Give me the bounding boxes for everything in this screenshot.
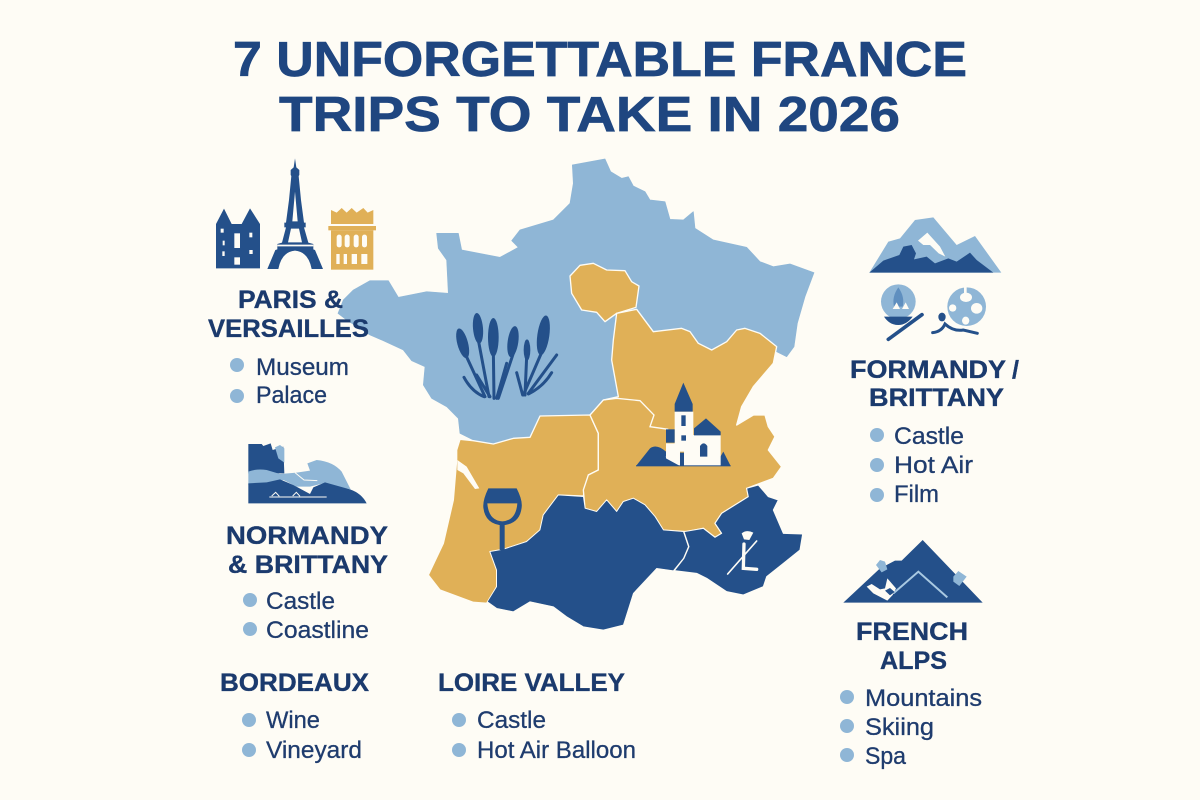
icon: lavender xyxy=(454,313,557,398)
region: estuary xyxy=(457,460,479,489)
heading: Paris & Versailles: VERSAILLES xyxy=(208,315,369,343)
heading: Formandy / Brittany: / xyxy=(1012,356,1019,384)
panel: Formandy / Brittany xyxy=(850,217,1019,508)
list: Bordeaux items: Wine xyxy=(266,707,320,734)
region: northern France xyxy=(338,159,814,444)
icon: church xyxy=(636,383,731,466)
heading: Paris & Versailles: PARIS & xyxy=(238,286,343,314)
heading: Bordeaux: BORDEAUX xyxy=(220,669,369,697)
list: Formandy items: Castle xyxy=(894,423,964,450)
heading: French Alps xyxy=(856,618,968,675)
panel: French Alps xyxy=(840,540,983,770)
region: southern France xyxy=(487,495,688,630)
list: Loire items: Castle xyxy=(477,707,546,734)
title: TRIPS TO TAKE IN 2026 xyxy=(279,88,900,142)
panel: Paris and Versailles xyxy=(208,158,376,409)
panel: Bordeaux xyxy=(220,669,369,764)
list: Formandy items xyxy=(870,423,973,508)
list: Alps items: Skiing xyxy=(865,714,934,741)
icon: film reel and swimmer xyxy=(933,287,986,333)
map of France xyxy=(338,159,814,630)
heading: Formandy / Brittany: BRITTANY xyxy=(869,384,1004,412)
title: 7 UNFORGETTABLE FRANCE xyxy=(233,33,967,87)
list: Formandy items: Film xyxy=(894,481,939,508)
region: southwest xyxy=(428,415,598,603)
icon: ski mountain xyxy=(843,540,983,603)
list: Formandy items: Hot Air xyxy=(894,452,973,479)
icon: Eiffel Tower xyxy=(267,158,323,269)
icon: mountain xyxy=(869,217,1001,273)
list: Paris items: Palace xyxy=(256,382,327,409)
heading: Loire Valley: LOIRE VALLEY xyxy=(438,669,625,697)
heading: Normandy & Brittany: NORMANDY xyxy=(226,522,388,550)
region: Paris basin xyxy=(570,263,639,322)
icon: skier xyxy=(728,531,757,574)
heading: Normandy & Brittany xyxy=(226,522,388,579)
icon: castle xyxy=(216,208,260,268)
heading: Formandy / Brittany xyxy=(850,356,1019,412)
list: Normandy items: Castle xyxy=(266,588,335,615)
icon: balloon and canoe xyxy=(881,284,922,339)
panel: Loire Valley xyxy=(438,669,636,764)
list: Alps items: Mountains xyxy=(865,685,982,712)
list: Paris items xyxy=(230,354,349,409)
region: Provence xyxy=(674,485,803,595)
icon: coastline xyxy=(248,443,367,503)
list: Paris items: Museum xyxy=(256,354,349,381)
list: Loire items: Hot Air Balloon xyxy=(477,737,636,764)
heading: Normandy & Brittany: & BRITTANY xyxy=(228,551,388,579)
heading: Formandy / Brittany: FORMANDY xyxy=(850,356,1006,384)
list: Bordeaux items: Vineyard xyxy=(266,737,362,764)
list: Alps items: Spa xyxy=(865,743,907,770)
icon: wine glass xyxy=(483,488,522,550)
list: Normandy items: Coastline xyxy=(266,617,369,644)
heading: French Alps: FRENCH xyxy=(856,618,968,646)
icon: palace xyxy=(328,208,376,270)
list: Normandy items xyxy=(243,588,369,644)
panel: Normandy and Brittany xyxy=(226,443,388,644)
divider between central regions xyxy=(603,398,668,429)
list: Alps items xyxy=(840,685,982,770)
list: Loire items xyxy=(452,707,636,764)
title xyxy=(233,33,967,142)
region: east central xyxy=(583,309,782,537)
heading: French Alps: ALPS xyxy=(880,647,947,675)
heading: Paris & Versailles xyxy=(208,286,369,343)
list: Bordeaux items xyxy=(242,707,362,764)
